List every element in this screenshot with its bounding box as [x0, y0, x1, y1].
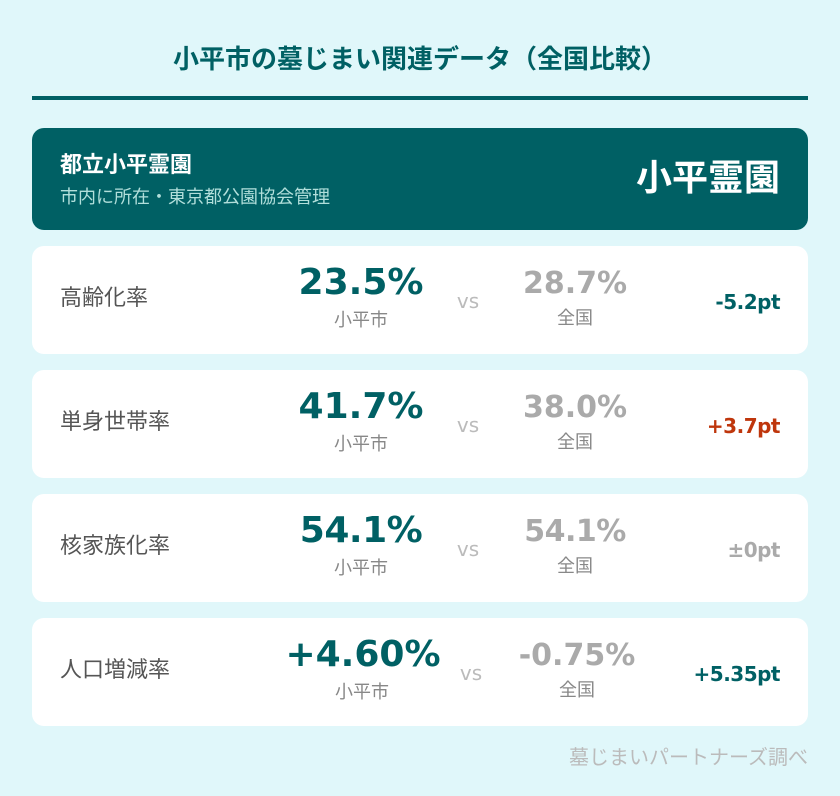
panel: highlight banner	[32, 128, 808, 230]
national value: 54.1%	[524, 514, 626, 549]
vs: vs	[457, 537, 479, 561]
Kodaira value: 23.5%	[299, 262, 423, 303]
national caption: 全国	[559, 680, 595, 701]
Kodaira value: 41.7%	[299, 386, 423, 427]
banner big label: 小平霊園	[636, 158, 780, 199]
Kodaira caption: 小平市	[334, 310, 388, 331]
difference: ±0pt	[727, 538, 780, 562]
banner subtext: 市内に所在・東京都公園協会管理	[60, 187, 330, 208]
vs: vs	[460, 661, 482, 685]
panel: aging rate row	[32, 246, 808, 354]
source note: 墓じまいパートナーズ調べ	[569, 745, 808, 769]
row label: 人口増減率	[60, 658, 170, 683]
Kodaira value: 54.1%	[300, 510, 422, 551]
Kodaira caption: 小平市	[334, 434, 388, 455]
vs: vs	[457, 413, 479, 437]
row label: 核家族化率	[60, 534, 170, 559]
national caption: 全国	[557, 308, 593, 329]
national value: 28.7%	[523, 266, 627, 301]
row label: 高齢化率	[60, 286, 148, 311]
difference: -5.2pt	[715, 290, 780, 314]
panel: population change row	[32, 618, 808, 726]
national caption: 全国	[557, 556, 593, 577]
panel: single household row	[32, 370, 808, 478]
row label: 単身世帯率	[60, 410, 170, 435]
national caption: 全国	[557, 432, 593, 453]
Kodaira value: +4.60%	[285, 634, 441, 675]
panel: nuclear family row	[32, 494, 808, 602]
national value: 38.0%	[523, 390, 627, 425]
vs: vs	[457, 289, 479, 313]
Kodaira caption: 小平市	[334, 558, 388, 579]
title: 小平市の墓じまい関連データ（全国比較）	[173, 45, 667, 75]
title rule	[32, 96, 808, 100]
Kodaira caption: 小平市	[335, 682, 389, 703]
difference: +3.7pt	[707, 414, 780, 438]
national value: -0.75%	[519, 638, 635, 673]
difference: +5.35pt	[694, 662, 780, 686]
banner heading: 都立小平霊園	[60, 153, 192, 178]
